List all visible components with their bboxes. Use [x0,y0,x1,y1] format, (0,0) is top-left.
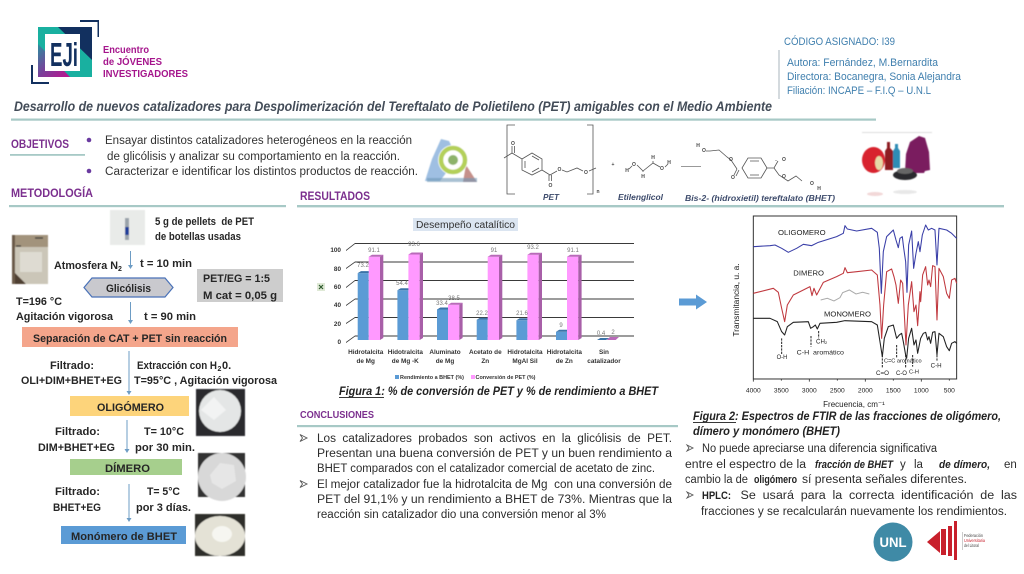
category labels: de Mg -K [392,358,419,365]
series and band labels: C-H aromático [797,349,844,356]
bars: Sin catalizador [597,337,619,340]
box: PET/EG ratio: PET/EG = 1:5 [203,273,270,285]
text: t = 90 min: t = 90 min [144,311,196,323]
y axis labels: 100 [330,247,341,254]
category labels: Hidrotalcita [348,349,384,356]
photo: monómero sample [195,514,245,556]
data labels: 91 [491,248,498,254]
x tick labels: 3000 [802,387,817,394]
x tick labels: 1000 [914,387,929,394]
data labels: 91.1 [567,248,579,254]
logo: Encuentro de Jóvenes Investigadores: INVESTIGADORES [103,68,188,80]
code and authors block [778,35,962,99]
bullet 1: BHET comparados con el catalizador comercial de acetato de zinc. [317,463,655,475]
structure: PET: PET [543,192,560,202]
structure: PET: O [549,183,553,189]
category labels: de Mg [356,358,375,365]
box: monómero de BHET [61,526,186,544]
text: extracción: T=95°C , Agitación vigorosa [134,375,278,387]
box: separación [22,327,238,347]
image: PET products [862,132,932,196]
icon: PET recycling [425,139,477,182]
text: filtrado 1: Filtrado: [50,360,94,372]
data labels: 0.4 [597,331,606,337]
bullet 1: Presentan una buena conversión de PET y un buen rendimiento a [317,448,673,460]
data labels: 9 [559,323,563,329]
category labels: Hidrotalcita [547,349,582,356]
category labels: Hidrotalcita [507,349,543,356]
panel: objetivos: Ensayar distintos catalizadores heterogéneos en la reacción [105,135,412,147]
text: filtrado 2: Filtrado: [55,426,100,438]
text: extracción: Extracción con H [137,360,217,372]
caption: figura 2 [693,411,1001,438]
panel: metodología [9,185,286,556]
curve: dímero [753,266,957,345]
x tick labels: 2500 [830,387,845,394]
text block: FTIR discussion: No puede apreciarse una diferencia significativa [702,443,938,455]
structure: etilenglicol: O [660,166,664,172]
structure: BHET: H [817,186,821,192]
panel: objetivos [10,135,418,178]
data labels: 22.2 [476,311,488,317]
arrow: to separación [128,302,133,324]
category labels: de Zn [556,358,573,365]
text: T 5°C: T= 5°C [147,486,180,498]
series and band labels [777,228,942,377]
plot frame and curves [731,216,957,409]
photo: PET bottle pellets [110,210,145,245]
arrow: to dímero [124,420,130,453]
logo: Encuentro de Jóvenes Investigadores: Encuentro [103,44,149,56]
structure: PET: O [584,170,588,176]
category labels: Zn [481,358,489,365]
text: atmosfera N2: 2 [118,266,122,273]
bars: Hidrotalcita MgAl Sil [516,253,542,340]
data labels: 38.5 [448,296,460,302]
text block: FTIR discussion [685,443,1017,486]
text: t = 10 min: t = 10 min [140,258,192,270]
text block: FTIR discussion: de dímero, [939,459,990,471]
text block: FTIR discussion: y [900,459,906,471]
legend: Rendimiento a BHET (%) [400,375,464,381]
category labels: Acetato de [469,349,502,356]
bars: Acetato de Zn [477,255,502,340]
logo: Federación Universitaria del Litoral: del Litoral [964,543,979,548]
x tick labels: 3500 [774,387,789,394]
text block: HPLC [687,490,1017,518]
structure: PET: O [511,141,515,147]
x tick labels: 1500 [886,387,901,394]
caption: figura 1: Figura 1: % de conversión de PET y % de rendimiento a BHET [339,384,660,398]
code and authors block: Directora: Bocanegra, Sonia Alejandra [787,71,962,83]
text block: FTIR discussion: entre el espectro de la [685,459,807,471]
text: extracción [134,360,278,387]
structure: PET [504,125,600,202]
structure: BHET: O [731,175,735,181]
panel: objetivos: OBJETIVOS [11,137,69,151]
y axis labels: 60 [334,284,341,291]
x tick labels [746,387,955,394]
structure: BHET: O [782,157,786,163]
text block: FTIR discussion: fracción de BHET [815,459,894,471]
structure: BHET [685,143,835,203]
text: atmosfera N2: Atmosfera N [54,260,118,272]
y axis labels: 80 [334,266,341,273]
structure: etilenglicol: O [632,162,636,168]
box: oligómero: OLIGÓMERO [97,401,164,414]
data labels: 54.4 [396,281,408,287]
y axis labels: 40 [334,302,341,309]
text: pellets: 5 g de pellets de PET [155,216,254,228]
x tick labels: 4000 [746,387,761,394]
caption: figura 2: dímero y monómero (BHET) [693,426,840,438]
data labels: 33.4 [436,301,448,307]
box: dímero [70,459,182,475]
logo: UNL: UNL [880,534,907,550]
text block: HPLC: Se usará para la correcta identificación de las [740,490,1017,502]
data labels: 21.6 [516,311,528,317]
text block: FTIR discussion: sí presenta señales diferentes. [802,474,967,486]
structure: BHET: Bis-2- (hidroxietil) tereftalato (BHET) [685,193,835,203]
arrow: to monómero [126,484,132,522]
bullet 2: PET del 91,1% y un rendimiento a BHET de 73%. Mientras que la [317,494,673,506]
structure: etilenglicol: Etilenglicol [618,192,664,202]
axis titles: Transmitancia, u. a. [731,263,741,337]
hexagon: glicólisis: Glicólisis [106,283,151,295]
structure: BHET: O [782,174,786,180]
series and band labels: OLIGOMERO [778,228,826,237]
text block: FTIR discussion: en [1004,459,1017,471]
category labels: de Mg [436,358,454,365]
logo: Federación Universitaria del Litoral [927,521,986,560]
text: pellets [155,216,254,243]
arrow: chart to spectrum [679,294,707,310]
series and band labels: DIMERO [793,269,824,278]
data labels: 2 [611,330,615,336]
data labels [357,242,615,337]
arrow: reaction [681,166,701,168]
category labels: MgAl Sil [512,358,538,365]
legend: Conversión de PET (%) [476,375,536,381]
bars: Hidrotalcita de Zn [556,255,582,340]
text: reaction conditions: T=196 °C [16,296,62,308]
caption: figura 2: Figura 2: Espectros de FTIR de las fracciones de oligómero, [693,411,1001,423]
heading: conclusiones: CONCLUSIONES [300,409,374,421]
plus sign: + [612,162,615,168]
icon: axis placeholder [317,283,325,291]
curve: monómero [753,318,957,358]
text: filtrado 2: DIM+BHET+EG [38,442,115,454]
series and band labels: CH₂ [816,338,828,345]
panel: resultados heading: RESULTADOS [300,189,370,203]
heading: metodología: METODOLOGÍA [11,185,93,200]
photo: oligómero sample [196,389,245,436]
data labels: 91.1 [368,248,380,254]
structure: etilenglicol: H [641,174,645,180]
series and band labels: C=O [876,370,889,377]
legend [395,375,536,381]
text: T 10°C: T= 10°C [144,426,184,438]
chart title: Desempeño catalítico [416,220,515,231]
text: reaction conditions: Agitación vigorosa [16,311,114,323]
bullet 2 [300,479,673,521]
axis ticks [753,379,949,382]
series and band labels: C-H [909,369,919,375]
structure: PET: n [596,189,600,195]
box: separación: Separación de CAT + PET sin reacción [33,333,227,345]
text: extracción: 0. [222,360,231,372]
logo: Encuentro de Jóvenes Investigadores: de JÓVENES [103,55,162,68]
peak markers [782,331,937,368]
text: filtrado 3: BHET+EG [53,502,101,514]
x tick labels: 500 [944,387,955,394]
structure: BHET: O [729,157,733,163]
text block: FTIR discussion: la [914,459,924,471]
y axis labels [330,247,341,346]
text: filtrado 3: Filtrado: [55,486,100,498]
photo: dímero sample [198,453,246,501]
y axis labels: 20 [334,321,341,328]
structure: etilenglicol: H [651,155,655,161]
box: monómero de BHET: Monómero de BHET [71,531,177,543]
structure: etilenglicol: H [625,168,629,174]
text: T 10°C: por 30 min. [135,442,195,454]
category labels: Sin [599,349,609,356]
arrow: to oligómero [126,351,132,395]
text: pellets: de botellas usadas [155,231,241,243]
grid [346,243,634,343]
text: T 10°C [135,426,195,454]
series and band labels: C-H [931,362,942,369]
chart: FTIR spectra [731,216,957,409]
logo: Federación Universitaria del Litoral: Federación [964,533,984,538]
text block: HPLC: fracciones y se recalcularán nuevamente los rendimientos. [701,506,1007,518]
text: T 5°C [136,486,191,514]
structure: PET: O [558,167,562,173]
box: PET/EG ratio [197,269,283,302]
bars: Hidrotalcita de Mg-K [397,252,423,340]
chemical reaction: PET + etilenglicol to BHET [504,125,835,203]
logo: Encuentro de Jóvenes Investigadores [31,20,188,84]
text block: FTIR discussion: oligómero [754,474,797,486]
logo: Encuentro de Jóvenes Investigadores: EJi [50,36,78,73]
category labels: Hidotralcita [388,349,423,356]
text: filtrado 3 [53,486,101,514]
structure: etilenglicol: H [667,160,671,166]
text block: HPLC: HPLC: [702,490,731,502]
bullet 2: El mejor catalizador fue la hidrotalcita de Mg con una conversión de [317,479,672,491]
bullet 2: reacción sin catalizador dio una conversión menor al 3% [317,509,606,521]
curve: oligómero [753,225,957,293]
box: dímero: DÍMERO [105,462,150,475]
hexagon: glicólisis [84,278,173,297]
bullet 1: Los catalizadores probados son activos en la glicólisis de PET. [317,433,672,445]
structure: BHET: O [810,181,814,187]
text: filtrado 1 [21,360,122,387]
bullet 1 [300,433,673,475]
x tick labels: 2000 [858,387,873,394]
logo: Federación Universitaria del Litoral: Universitaria [964,538,986,543]
structure: BHET: O [702,148,706,154]
panel: objetivos: Caracterizar e identificar los distintos productos de reacción. [105,166,418,178]
logo: UNL [874,522,912,562]
bar chart: desempeño catalítico [317,218,634,381]
text: filtrado 2 [38,426,115,454]
text block: FTIR discussion: cambio la de [685,474,748,486]
code and authors block: Filiación: INCAPE – F.I.Q – U.N.L [787,85,931,97]
series and band labels: MONOMERO [824,310,871,319]
text: filtrado 1: OLI+DIM+BHET+EG [21,375,122,387]
code and authors block: Autora: Fernández, M.Bernardita [787,57,939,69]
code and authors block: CÓDIGO ASIGNADO: I39 [784,35,895,48]
data labels: 93.6 [408,242,420,248]
molecule inset [821,290,869,301]
structure: BHET: H [696,143,700,149]
axis titles [731,263,885,409]
bars: Hidrotalcita de Mg [358,255,383,340]
text: reaction conditions [16,296,114,323]
data labels: 73.2 [357,263,369,269]
panel: objetivos: de glicólisis y analizar su comportamiento en la reacción. [107,151,400,163]
category labels: Aluminato [429,349,461,356]
series and band labels: C=C aromático [884,359,922,365]
text: extracción: 2 [218,366,222,373]
text: T 5°C: por 3 días. [136,502,191,514]
panel: conclusiones [297,409,678,521]
box: PET/EG ratio: M cat = 0,05 g [203,290,277,302]
arrow: to glicólisis [128,251,133,269]
bars: Aluminato de Mg [437,303,463,340]
series and band labels: C-O [896,370,907,377]
axis titles: Frecuencia, cm⁻¹ [823,399,885,409]
y axis labels: 0 [337,339,341,346]
data labels: 93.2 [527,245,539,251]
series and band labels: O-H [777,354,788,361]
category labels: catalizador [587,358,621,365]
category labels [348,349,621,365]
photo: reactor [12,235,48,284]
structure: etilenglicol [618,155,671,202]
title: Desarrollo de nuevos catalizadores para Despolimerización del Tereftalato de Polietileno (PET) amigables con el Medio Ambiente [14,99,772,114]
box: oligómero [70,396,189,416]
